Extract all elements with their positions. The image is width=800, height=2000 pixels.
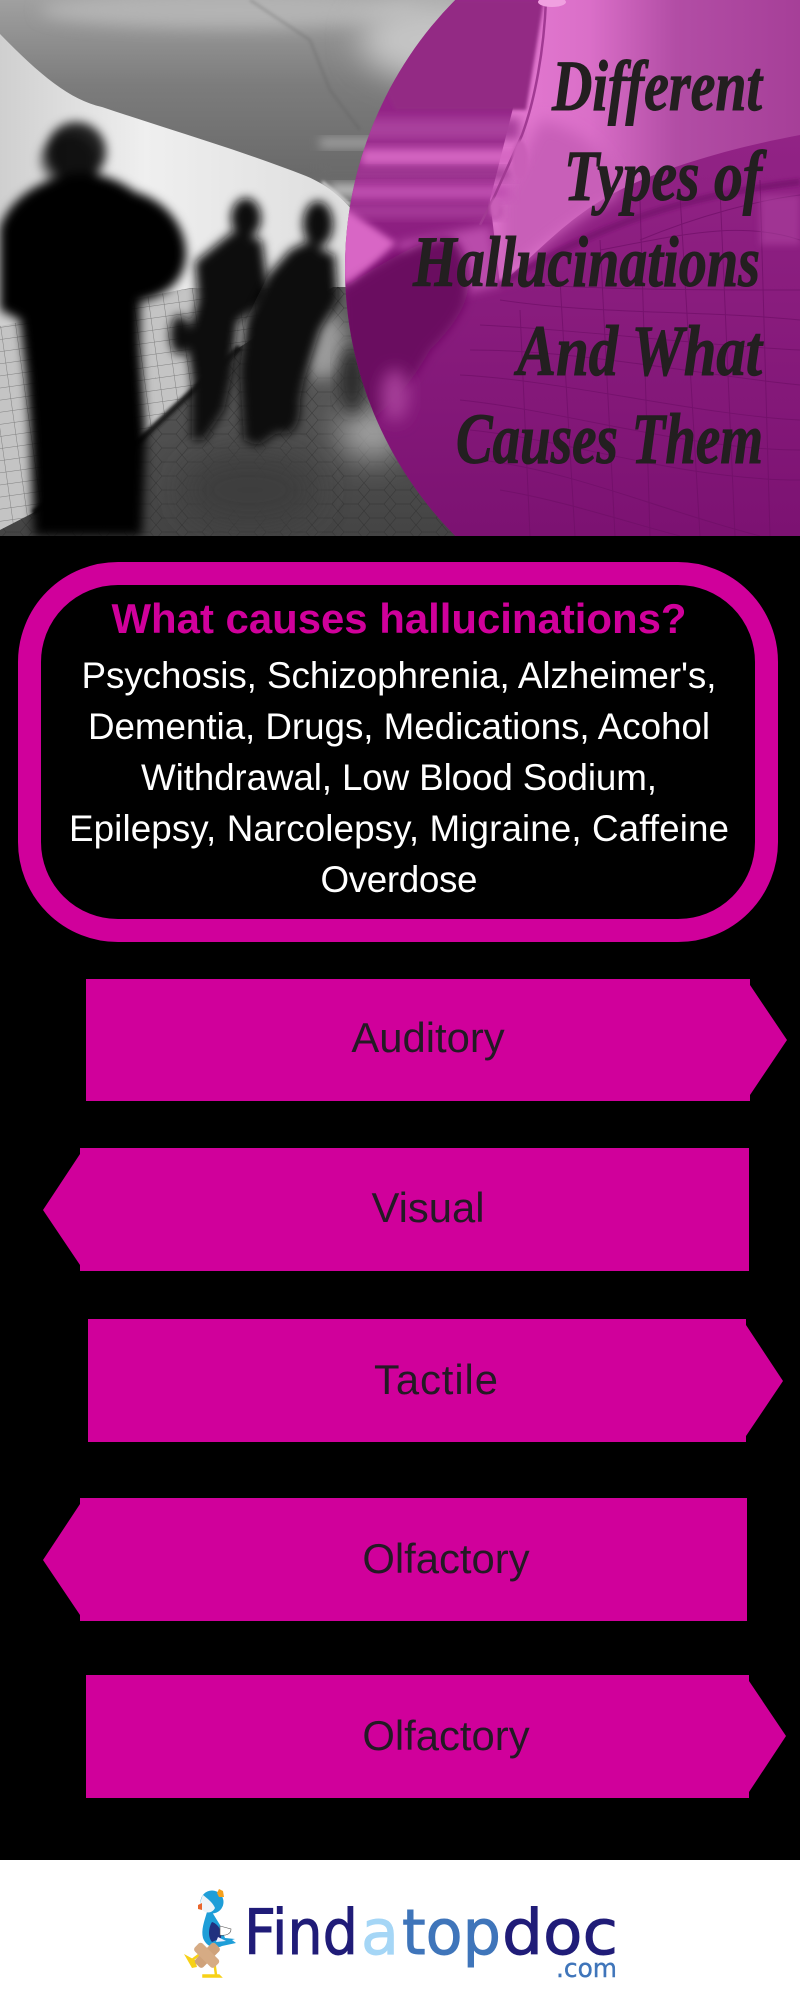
- wall tiles: [460, 180, 800, 536]
- foreground figure: [0, 122, 186, 536]
- photo of blurred people walking through a tunnel: [0, 0, 455, 536]
- causes panel text: [69, 595, 729, 900]
- icon: bird mascot with bandage: [184, 1889, 236, 1977]
- logo wordmark: .com: [556, 1954, 617, 1984]
- right figure: [240, 201, 338, 446]
- arrow: olfactory left: Olfactory: [362, 1535, 530, 1582]
- logo: [184, 1889, 618, 1984]
- arrow: auditory: Auditory: [351, 1014, 505, 1061]
- arrow: olfactory right: Olfactory: [362, 1712, 530, 1759]
- causes list: Withdrawal, Low Blood Sodium,: [141, 757, 657, 798]
- header image with title: [0, 0, 800, 536]
- arrow: olfactory right: [86, 1675, 786, 1798]
- hallucination type arrows: [43, 979, 787, 1798]
- logo wordmark: [244, 1896, 618, 1984]
- title: [412, 46, 767, 479]
- tunnel wall: [0, 34, 365, 340]
- arrow: visual: [43, 1148, 749, 1271]
- logo wordmark: top: [402, 1896, 501, 1969]
- causes list: Dementia, Drugs, Medications, Acohol: [88, 706, 710, 747]
- logo wordmark: doc: [502, 1896, 618, 1969]
- arrow: auditory: [86, 979, 787, 1101]
- arrow: olfactory left: [43, 1498, 747, 1621]
- causes list: Overdose: [320, 859, 478, 900]
- ceiling pipe with lamps: [480, 0, 566, 225]
- heading: What causes hallucinations?: [112, 595, 686, 642]
- logo wordmark: a: [361, 1896, 399, 1969]
- tunnel floor: [0, 287, 480, 536]
- arrow: tactile: Tactile: [374, 1356, 498, 1403]
- magenta circle overlay: [340, 0, 800, 536]
- causes list: [69, 655, 729, 900]
- tiled wall band: [0, 288, 255, 530]
- middle figure: [170, 198, 270, 440]
- logo wordmark: Find: [244, 1896, 358, 1969]
- causes list: Psychosis, Schizophrenia, Alzheimer's,: [82, 655, 716, 696]
- causes list: Epilepsy, Narcolepsy, Migraine, Caffeine: [69, 808, 729, 849]
- arrow: visual: Visual: [371, 1184, 485, 1231]
- arrow: tactile: [88, 1319, 783, 1442]
- footer with logo: [0, 1860, 800, 2000]
- panel: what causes hallucinations: [18, 562, 778, 942]
